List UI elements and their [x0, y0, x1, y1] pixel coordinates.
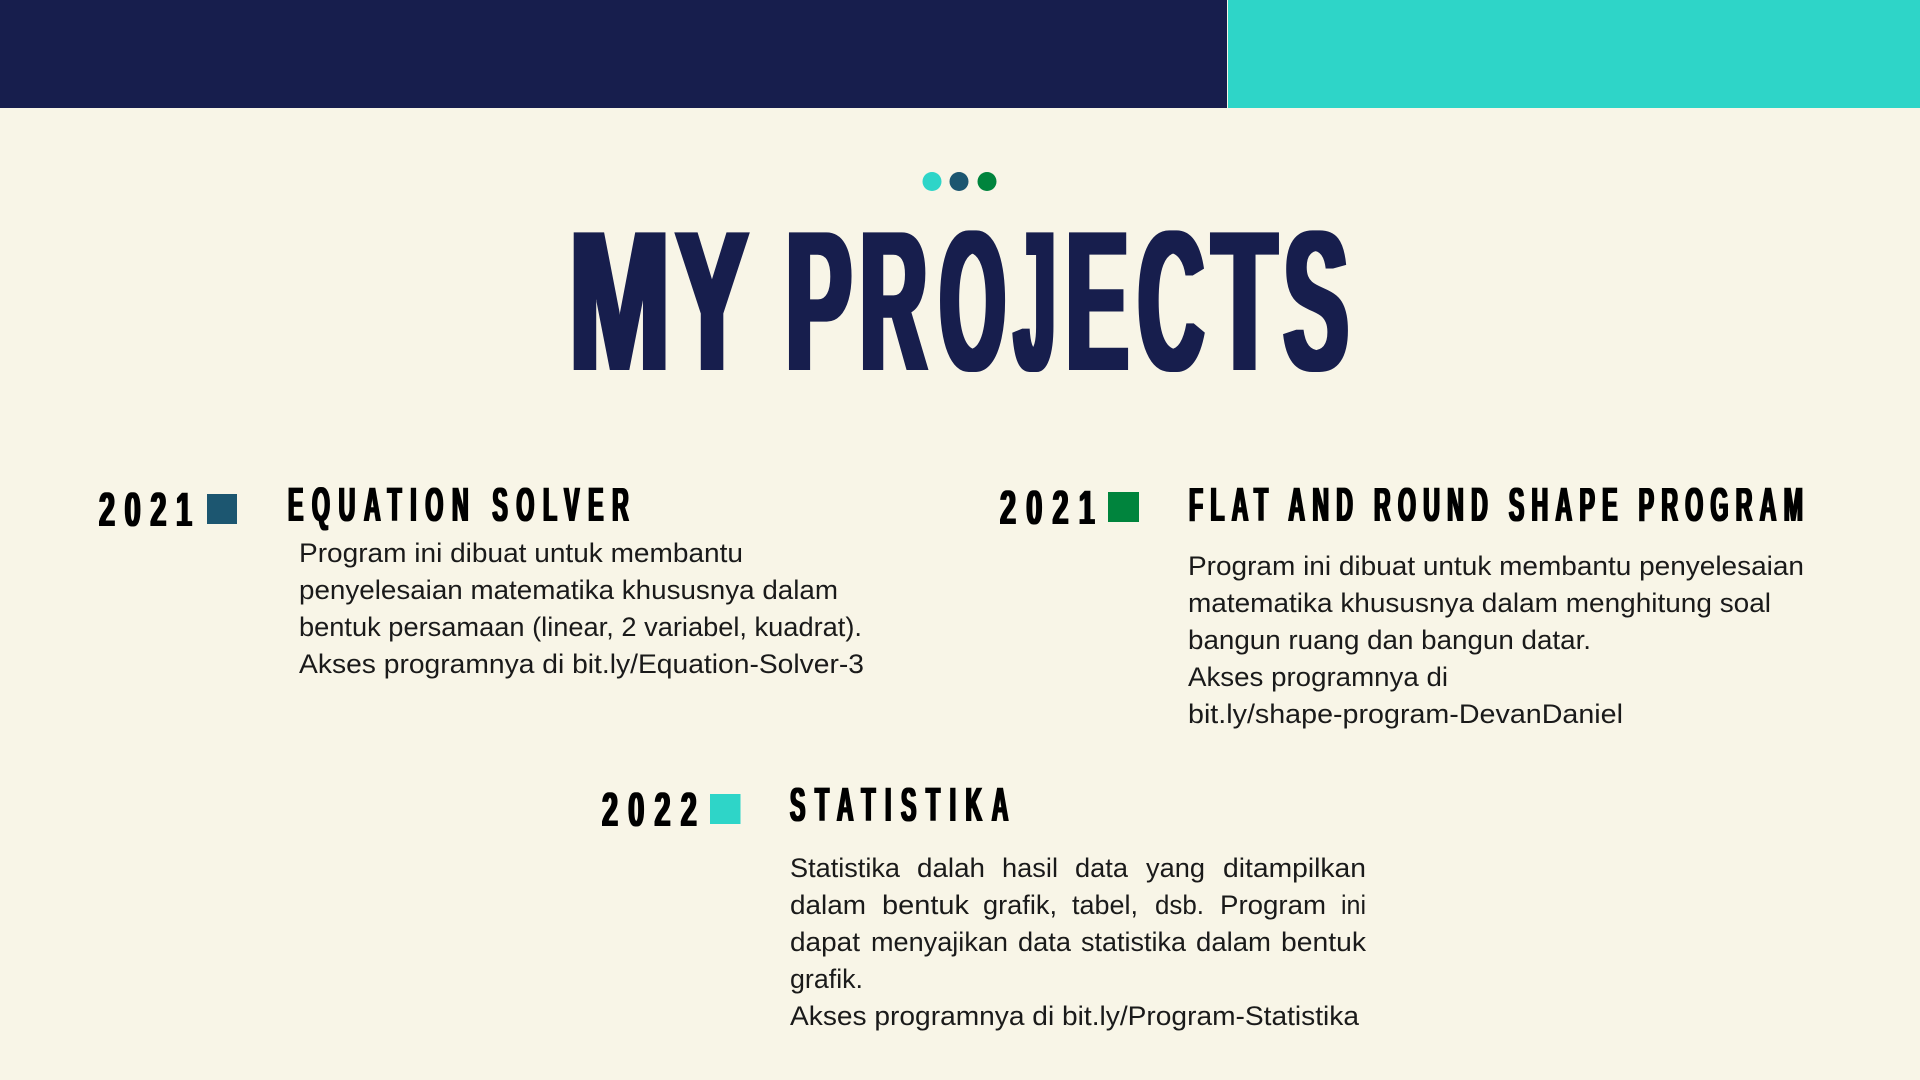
description: hasil: [1002, 853, 1058, 883]
description: dalam: [1196, 927, 1271, 957]
year 2021: 2021: [1000, 482, 1095, 535]
title: M: [569, 190, 670, 413]
marker square green: [1108, 492, 1139, 522]
description: Program ini dibuat untuk membantu: [299, 538, 743, 568]
description: matematika khususnya dalam menghitung soal: [1188, 588, 1771, 618]
description: [1188, 551, 1804, 729]
description: [790, 853, 1367, 1031]
description: ditampilkan: [1223, 853, 1366, 883]
year 2021: 2021: [99, 484, 192, 537]
header band: teal: [1228, 0, 1920, 108]
description: grafik,: [983, 890, 1057, 920]
description: Akses programnya di: [1188, 662, 1448, 692]
description: Program ini dibuat untuk membantu penyelesaian: [1188, 551, 1804, 581]
heading: STATISTIKA: [790, 778, 1008, 831]
title: E: [1066, 190, 1128, 413]
title: [569, 190, 1348, 413]
year 2022: 2022: [602, 784, 697, 837]
description: data: [1018, 927, 1072, 957]
description: bangun ruang dan bangun datar.: [1188, 625, 1591, 655]
title: C: [1138, 190, 1204, 413]
description: statistika: [1081, 927, 1187, 957]
title: O: [940, 190, 1005, 413]
description: menyajikan: [871, 927, 1008, 957]
heading: FLAT AND ROUND SHAPE PROGRAM: [1189, 478, 1803, 531]
slide canvas: S: [1284, 190, 1348, 413]
marker square blue: [207, 494, 237, 524]
description: Akses programnya di bit.ly/Equation-Solver-3: [299, 649, 864, 679]
decorative three dots: [922, 172, 996, 191]
panel: flat and round shape program: [1000, 478, 1804, 729]
description: dapat: [790, 927, 861, 957]
description: bentuk persamaan (linear, 2 variabel, kuadrat).: [299, 612, 862, 642]
title: P: [786, 190, 851, 413]
description: dalah: [917, 853, 985, 883]
title: T: [1212, 190, 1277, 413]
description: grafik.: [790, 964, 863, 994]
description: dsb.: [1155, 890, 1204, 920]
title: J: [1015, 190, 1055, 413]
description: tabel,: [1072, 890, 1138, 920]
description: Statistika: [790, 853, 901, 883]
description: Program: [1220, 890, 1326, 920]
description: ini: [1341, 890, 1366, 920]
description: bentuk: [1281, 927, 1367, 957]
title: Y: [676, 190, 748, 413]
panel: statistika: [602, 778, 1367, 1031]
panel: equation solver: [99, 478, 864, 679]
description: penyelesaian matematika khususnya dalam: [299, 575, 838, 605]
header band: navy: [0, 0, 1227, 108]
description: data: [1075, 853, 1129, 883]
description: bentuk: [882, 890, 970, 920]
description: yang: [1146, 853, 1205, 883]
description: Akses programnya di bit.ly/Program-Statistika: [790, 1001, 1360, 1031]
title: R: [860, 190, 927, 413]
description: [299, 538, 864, 679]
description: bit.ly/shape-program-DevanDaniel: [1188, 699, 1623, 729]
description: dalam: [790, 890, 866, 920]
heading: EQUATION SOLVER: [288, 478, 629, 531]
marker square teal: [710, 794, 740, 824]
